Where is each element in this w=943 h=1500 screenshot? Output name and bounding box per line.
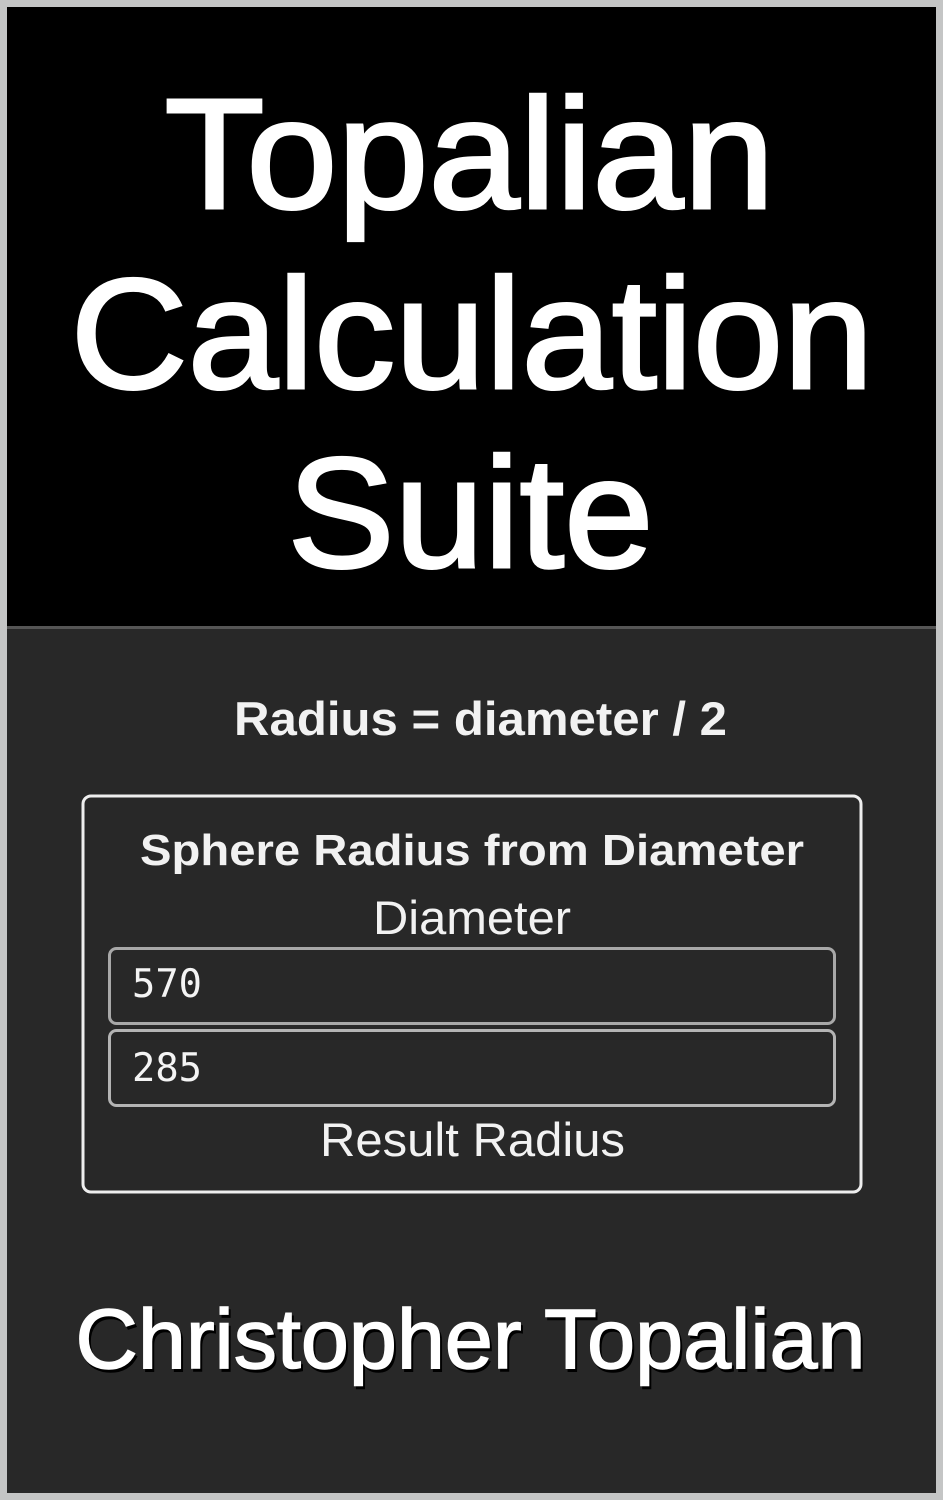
- output: result radius value: [110, 1030, 834, 1106]
- input: diameter value: 570: [132, 962, 202, 1007]
- author name: Christopher Topalian: [78, 1295, 868, 1389]
- panel: dark lower area: [7, 626, 936, 1493]
- result label: Result Radius: [320, 1113, 625, 1166]
- output: result radius value: 285: [132, 1046, 202, 1091]
- input: diameter value: [110, 948, 834, 1024]
- formula heading: Radius = diameter / 2: [234, 692, 727, 745]
- panel: calculator card: [83, 796, 861, 1192]
- card heading: Sphere Radius from Diameter: [140, 826, 804, 875]
- title: [70, 67, 874, 601]
- panel: black title area: [7, 7, 936, 626]
- title: Calculation: [70, 247, 874, 422]
- title: Suite: [288, 426, 654, 601]
- title: Topalian: [164, 67, 774, 242]
- author name: Christopher Topalian: [76, 1292, 866, 1386]
- diameter label: Diameter: [373, 891, 571, 944]
